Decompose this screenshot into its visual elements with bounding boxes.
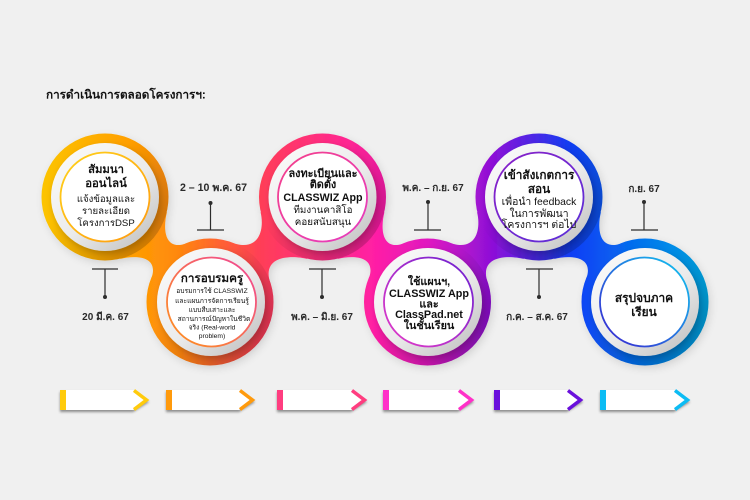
title: การดำเนินการตลอดโครงการฯ: <box>46 86 206 102</box>
step 6: semester summary <box>591 248 699 356</box>
arrow 5 <box>494 390 583 410</box>
date marker: 2 – 10 พ.ค. 67: 2 – 10 พ.ค. 67 <box>180 182 247 194</box>
step 2: teacher training: การอบรมครู <box>181 272 244 286</box>
date marker: พ.ค. – ก.ย. 67 <box>402 183 464 230</box>
step 3: registration: ลงทะเบียนและ <box>288 167 358 180</box>
step 3: registration: ติดตั้ง <box>310 176 336 191</box>
date marker: ก.ค. – ส.ค. 67: ก.ค. – ส.ค. 67 <box>506 312 568 323</box>
step 3: registration: ทีมงานคาสิโอ <box>293 204 353 216</box>
ring shading <box>42 134 708 366</box>
step 3: registration <box>268 143 376 251</box>
step 5: classroom observation: ในการพัฒนา <box>509 207 569 220</box>
step 2: teacher training: อบรมการใช้ CLASSWIZ <box>176 287 248 295</box>
arrow 1 <box>60 390 149 410</box>
step 4: classroom use: ใช้แผนฯ, <box>408 274 450 288</box>
step 1: online seminar: สัมมนา <box>88 163 124 176</box>
step 1: online seminar <box>51 143 159 251</box>
step 1: online seminar: แจ้งข้อมูลและ <box>77 194 135 205</box>
date marker: พ.ค. – มิ.ย. 67: พ.ค. – มิ.ย. 67 <box>291 311 353 323</box>
date marker: พ.ค. – มิ.ย. 67 <box>291 269 353 323</box>
step 5: classroom observation: สอน <box>528 182 551 196</box>
step 1: online seminar: รายละเอียด <box>82 205 130 217</box>
step 5: classroom observation <box>485 143 593 251</box>
step 6: semester summary: สรุปจบภาค <box>615 291 673 306</box>
step 2: teacher training: และแผนการจัดการเรียนรู้ <box>175 297 249 305</box>
step 4: classroom use: ในชั้นเรียน <box>404 317 455 332</box>
step 2: teacher training: แบบสืบเสาะและ <box>189 306 235 314</box>
date marker: ก.ย. 67: ก.ย. 67 <box>628 184 660 195</box>
date marker: ก.ย. 67 <box>628 184 660 230</box>
date marker: พ.ค. – ก.ย. 67: พ.ค. – ก.ย. 67 <box>402 183 464 194</box>
step 2: teacher training <box>157 248 265 356</box>
date marker: 20 มี.ค. 67: 20 มี.ค. 67 <box>82 311 129 323</box>
date marker: ก.ค. – ส.ค. 67 <box>506 269 568 323</box>
step 2: teacher training: problem) <box>199 333 225 340</box>
timeline ribbon <box>42 134 708 366</box>
step 5: classroom observation: เข้าสังเกตการ <box>504 168 575 182</box>
arrow 6 <box>600 390 690 410</box>
step 5: classroom observation: เพื่อนำ feedback <box>502 194 577 208</box>
step 3: registration: CLASSWIZ App <box>283 192 363 204</box>
step 1: online seminar: ออนไลน์ <box>85 176 127 190</box>
date marker: 2 – 10 พ.ค. 67 <box>180 182 247 230</box>
step 6: semester summary: เรียน <box>631 305 658 319</box>
step 4: classroom use: ClassPad.net <box>395 309 463 321</box>
step 4: classroom use: และ <box>419 298 439 310</box>
arrow 4 <box>383 390 474 410</box>
arrow 3 <box>277 390 367 410</box>
step 5: classroom observation: โครงการฯ ต่อไป <box>502 218 576 231</box>
step 4: classroom use: CLASSWIZ App <box>389 288 469 300</box>
step 4: classroom use <box>374 248 482 356</box>
step 1: online seminar: โครงการDSP <box>77 217 135 229</box>
arrow 2 <box>166 390 255 410</box>
step 2: teacher training: จริง (Real-world <box>189 324 236 332</box>
date marker: 20 มี.ค. 67 <box>82 269 129 323</box>
step 3: registration: คอยสนับสนุน <box>295 217 352 228</box>
step 2: teacher training: สถานการณ์ปัญหาในชีวิต <box>178 315 250 323</box>
